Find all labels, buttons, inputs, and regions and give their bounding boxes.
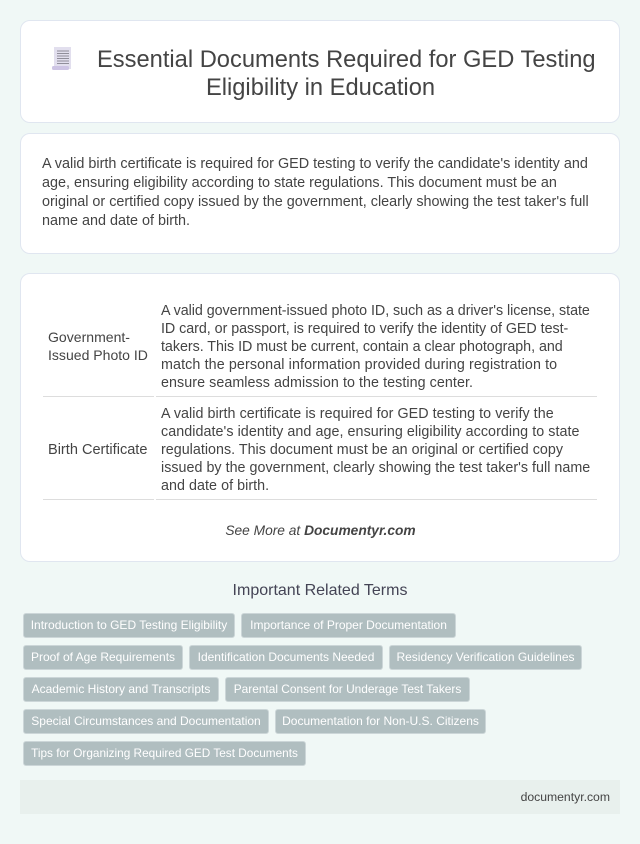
title bbox=[97, 47, 596, 101]
row text: birth certificate: regulations. This document must be an original or certified copy bbox=[161, 442, 563, 458]
title: Essential Documents Required for GED Testing bbox=[97, 47, 596, 73]
tag bbox=[241, 613, 456, 638]
intro text: name and date of birth. bbox=[42, 213, 190, 229]
icon: document scroll bbox=[52, 47, 71, 70]
see more link: See More at Documentyr.com bbox=[225, 523, 416, 538]
row label: government-issued photo id: Issued Photo ID bbox=[48, 347, 148, 363]
tag: Academic History and Transcripts bbox=[32, 682, 210, 696]
tag: Tips for Organizing Required GED Test Documents bbox=[31, 746, 298, 760]
tag: Proof of Age Requirements bbox=[31, 650, 175, 664]
footer bar bbox=[20, 780, 620, 814]
tag: Documentation for Non-U.S. Citizens bbox=[282, 714, 479, 728]
intro text: A valid birth certificate is required for GED testing to verify the candidate's identity and bbox=[42, 156, 588, 172]
row text: birth certificate: issued by the government, clearly showing the test taker's full name bbox=[161, 460, 590, 476]
tag bbox=[23, 677, 219, 702]
tag list bbox=[23, 613, 582, 766]
panel: title card bbox=[20, 20, 620, 123]
tag: Special Circumstances and Documentation bbox=[31, 714, 261, 728]
row text: birth certificate: and date of birth. bbox=[161, 478, 269, 494]
tag: Residency Verification Guidelines bbox=[396, 650, 575, 664]
tag: Parental Consent for Underage Test Takers bbox=[234, 682, 461, 696]
row text: birth certificate: candidate's identity and age, ensuring eligibility according to state bbox=[161, 424, 580, 440]
row text: government-issued photo id: ID card, or passport, is required to verify the identity of GED test- bbox=[161, 321, 568, 337]
panel: documents table card bbox=[20, 273, 620, 562]
tag bbox=[275, 709, 486, 734]
tag bbox=[23, 709, 269, 734]
tag bbox=[23, 645, 183, 670]
row label: birth certificate: Birth Certificate bbox=[48, 442, 147, 458]
row text: government-issued photo id: A valid government-issued photo ID, such as a driver's license, state bbox=[161, 303, 590, 319]
heading: important related terms: Important Related Terms bbox=[233, 582, 407, 599]
tag bbox=[225, 677, 470, 702]
row label: government-issued photo id bbox=[48, 329, 148, 363]
row text: government-issued photo id bbox=[161, 303, 590, 391]
row text: government-issued photo id: ensure seamless admission to the testing center. bbox=[161, 375, 473, 391]
row text: birth certificate: A valid birth certificate is required for GED testing to verify the bbox=[161, 406, 554, 422]
tag: Importance of Proper Documentation bbox=[250, 618, 447, 632]
panel: intro text card bbox=[20, 133, 620, 254]
tag bbox=[389, 645, 582, 670]
tag bbox=[23, 741, 306, 766]
intro text bbox=[42, 156, 589, 229]
row label: government-issued photo id: Government- bbox=[48, 329, 130, 345]
tag bbox=[23, 613, 235, 638]
row text: birth certificate bbox=[161, 406, 590, 494]
intro text: age, ensuring eligibility according to state regulations. This document must be an bbox=[42, 175, 557, 191]
tag: Introduction to GED Testing Eligibility bbox=[31, 618, 227, 632]
tag bbox=[189, 645, 383, 670]
title: Eligibility in Education bbox=[206, 75, 435, 101]
intro text: original or certified copy issued by the government, clearly showing the test taker's full bbox=[42, 194, 589, 210]
row text: government-issued photo id: match the personal information provided during registration to bbox=[161, 357, 557, 373]
footer bar: documentyr.com bbox=[521, 790, 610, 804]
tag: Identification Documents Needed bbox=[198, 650, 374, 664]
row text: government-issued photo id: takers. This ID must be current, contain a clear photograph, and bbox=[161, 339, 563, 355]
